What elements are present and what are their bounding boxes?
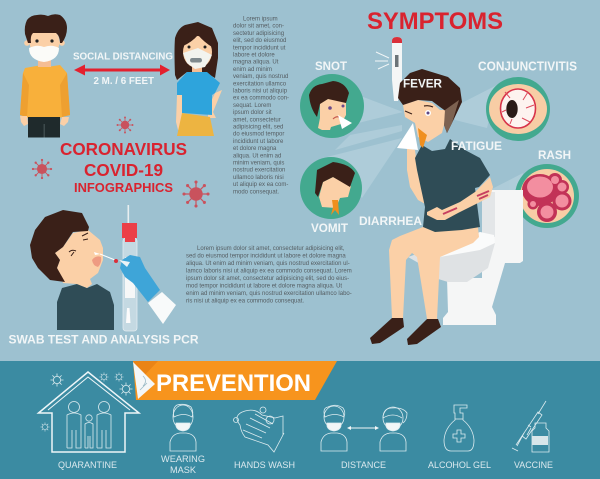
text block: center lorem: enim ad minim veniam, quis nostrud exercitation ullamco labo-: [186, 291, 352, 297]
figure: swab test: [30, 205, 176, 331]
label: alcohol gel: ALCOHOL GEL: [428, 460, 491, 470]
social distancing arrow: 2 M. / 6 FEET: [94, 76, 154, 87]
social distancing arrow: [73, 52, 173, 87]
icon: wearing mask: [170, 404, 196, 451]
panel: rash: [515, 164, 579, 228]
text block: center lorem: Lorem ipsum dolor sit amet, consectetur adipisicing elit,: [197, 246, 345, 252]
label: snot: SNOT: [315, 61, 347, 73]
label: rash: RASH: [538, 149, 571, 162]
icon: vaccine: [512, 401, 549, 452]
text block: side lorem: elit, sed do eiusmod: [233, 38, 286, 44]
figure: man with mask: [20, 14, 70, 138]
icon: virus particles: [32, 117, 210, 208]
light beams: [323, 85, 523, 215]
label: quarantine: QUARANTINE: [58, 460, 117, 470]
title: COVID-19: [84, 160, 163, 180]
icon: thermometer: [375, 37, 402, 101]
label: conjunctivitis: CONJUNCTIVITIS: [478, 60, 577, 74]
banner: prevention: [133, 361, 337, 400]
text block: side lorem: do eiusmod tempor: [233, 132, 284, 138]
label: fever: FEVER: [403, 78, 443, 91]
text block: side lorem: aliqua. Ut enim ad: [233, 153, 281, 159]
text block: side lorem: incididunt ut labore: [233, 139, 284, 145]
icon: hands wash: [234, 407, 284, 452]
text block: side lorem: sequat. Lorem: [233, 103, 271, 109]
text block: side lorem: adipisicing elit, sed: [233, 124, 283, 130]
label: distance: DISTANCE: [341, 460, 386, 470]
text block: side lorem: magna aliqua. Ut: [233, 60, 279, 66]
text block: side lorem: ipsum dolor sit: [233, 110, 272, 116]
text block: side lorem: modo consequat.: [233, 189, 279, 195]
text block: side lorem: nostrud exercitation: [233, 168, 285, 174]
label: vaccine: VACCINE: [514, 460, 553, 470]
panel: prevention band: [0, 361, 600, 479]
text block: side lorem: enim ad minim: [233, 67, 272, 73]
text block: center lorem: mod tempor incididunt ut labore et dolore magna aliqua. Ut: [186, 284, 342, 290]
label: diarrhea: DIARRHEA: [359, 214, 422, 228]
text block: side lorem: ut aliquip ex ea com-: [233, 182, 288, 188]
figure: toilet: [408, 190, 523, 325]
title: [60, 139, 187, 195]
title: CORONAVIRUS: [60, 139, 187, 159]
text block: side lorem: veniam, quis nostrud: [233, 74, 288, 80]
panel: snot: [300, 74, 364, 138]
text block: side lorem: tempor incididunt ut: [233, 45, 286, 51]
label: social distancing: SOCIAL DISTANCING: [73, 52, 173, 62]
figure: sick man: [370, 69, 493, 345]
text block: side lorem: sectetur adipisicing: [233, 31, 284, 37]
text block: center lorem: ipsum dolor sit amet, consectetur adipisicing elit, sed do eius-: [186, 276, 349, 282]
label: vomit: VOMIT: [311, 222, 349, 235]
title: INFOGRAPHICS: [74, 181, 173, 195]
banner: prevention: PREVENTION: [156, 370, 311, 397]
label: wearing mask: WEARING: [161, 454, 205, 464]
text block: side lorem: dolor sit amet, con-: [233, 24, 284, 30]
text block: side lorem: minim veniam, quis: [233, 160, 284, 166]
text block: center lorem: sed do eiusmod tempor incididunt ut labore et dolore magna: [186, 254, 346, 260]
panel: vomit: [300, 157, 362, 219]
text block: side lorem: ex ea commodo con-: [233, 96, 289, 102]
label: wearing mask: [161, 454, 205, 475]
label: hands wash: HANDS WASH: [234, 460, 295, 470]
text block: center lorem: ris nisi ut aliquip ex ea commodo consequat.: [186, 298, 304, 304]
text block: center lorem: aliqua. Ut enim ad minim veniam, quis nostrud exercitation ul-: [186, 261, 350, 267]
label: fatigue: FATIGUE: [451, 140, 502, 153]
panel: conjunctivitis: [486, 77, 550, 141]
text block: side lorem: Lorem ipsum: [243, 16, 278, 22]
label: wearing mask: MASK: [170, 465, 197, 475]
label: swab test: SWAB TEST AND ANALYSIS PCR: [8, 332, 199, 346]
text block: side lorem: amet, consectetur: [233, 117, 281, 123]
text block: side lorem: labore et dolore: [233, 52, 275, 58]
icon: alcohol gel: [444, 405, 474, 451]
icon: distance: [321, 405, 407, 451]
text block: center lorem: lamco laboris nisi ut aliquip ex ea commodo consequat. Lorem: [186, 268, 352, 274]
heading: symptoms: SYMPTOMS: [367, 8, 503, 35]
text block: side lorem: laboris nisi ut aliquip: [233, 88, 288, 94]
icon: quarantine house: [38, 372, 139, 452]
text block: side lorem: ullamco laboris nisi: [233, 175, 284, 181]
figure: woman with respirator mask: [174, 22, 222, 136]
text block: side lorem: et dolore magna: [233, 146, 277, 152]
text block: side lorem: exercitation ullamco: [233, 81, 287, 87]
